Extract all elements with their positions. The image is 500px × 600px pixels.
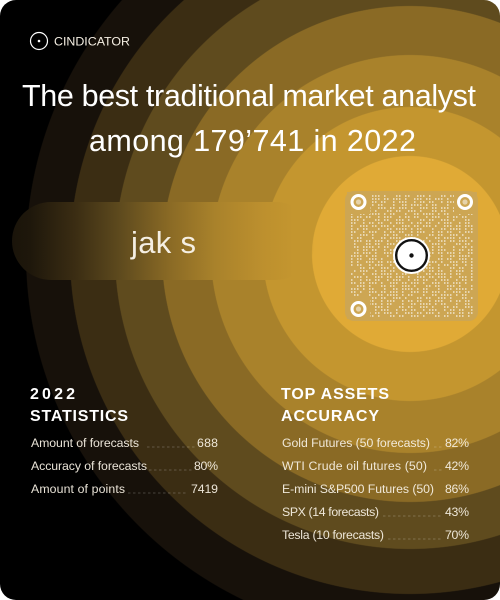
name banner: jak s bbox=[130, 225, 196, 260]
name banner bbox=[12, 202, 315, 280]
row: amount of points: 7419 bbox=[191, 482, 218, 496]
row: SPX: SPX (14 forecasts) bbox=[282, 505, 379, 519]
row: gold futures: 82% bbox=[445, 436, 469, 450]
title bbox=[22, 79, 477, 158]
brand logo: CINDICATOR bbox=[54, 36, 130, 48]
row: tesla: Tesla (10 forecasts) bbox=[282, 528, 384, 542]
row: SPX bbox=[282, 505, 469, 519]
QR finder patch covers bbox=[347, 192, 477, 319]
title: The best traditional market analyst bbox=[22, 79, 477, 113]
QR finder: top right bbox=[458, 196, 472, 208]
row: amount of forecasts: 688 bbox=[197, 436, 218, 450]
row: amount of forecasts bbox=[31, 436, 218, 450]
panel: top assets accuracy bbox=[281, 386, 469, 542]
row: amount of forecasts: Amount of forecasts bbox=[31, 436, 139, 450]
row: accuracy of forecasts: 80% bbox=[194, 459, 218, 473]
row: WTI crude oil: WTI Crude oil futures (50) bbox=[282, 459, 427, 473]
row: e-mini S&P500: 86% bbox=[445, 482, 469, 496]
row: e-mini S&P500: E-mini S&P500 Futures (50) bbox=[282, 482, 434, 496]
brand logo bbox=[30, 32, 130, 50]
statistics heading bbox=[30, 386, 128, 425]
QR center logo bbox=[393, 237, 430, 274]
row: SPX: 43% bbox=[445, 505, 469, 519]
row: gold futures: Gold Futures (50 forecasts) bbox=[282, 436, 430, 450]
assets heading bbox=[281, 386, 389, 425]
panel: 2022 statistics bbox=[30, 386, 218, 496]
assets heading: TOP ASSETS bbox=[281, 386, 389, 403]
QR finder: top left bbox=[352, 196, 365, 208]
row: amount of points: Amount of points bbox=[31, 482, 125, 496]
row: accuracy of forecasts bbox=[31, 459, 218, 473]
statistics heading: 2022 bbox=[30, 386, 75, 403]
row: accuracy of forecasts: Accuracy of forecasts bbox=[31, 459, 147, 473]
row: tesla: 70% bbox=[445, 528, 469, 542]
row: amount of points bbox=[31, 482, 218, 496]
row: WTI crude oil: 42% bbox=[445, 459, 469, 473]
statistics heading: STATISTICS bbox=[30, 408, 128, 425]
QR code bbox=[345, 191, 478, 321]
QR finder: bottom left bbox=[352, 302, 365, 316]
row: tesla bbox=[282, 528, 469, 542]
title: among 179’741 in 2022 bbox=[89, 124, 416, 158]
assets heading: ACCURACY bbox=[281, 408, 379, 425]
